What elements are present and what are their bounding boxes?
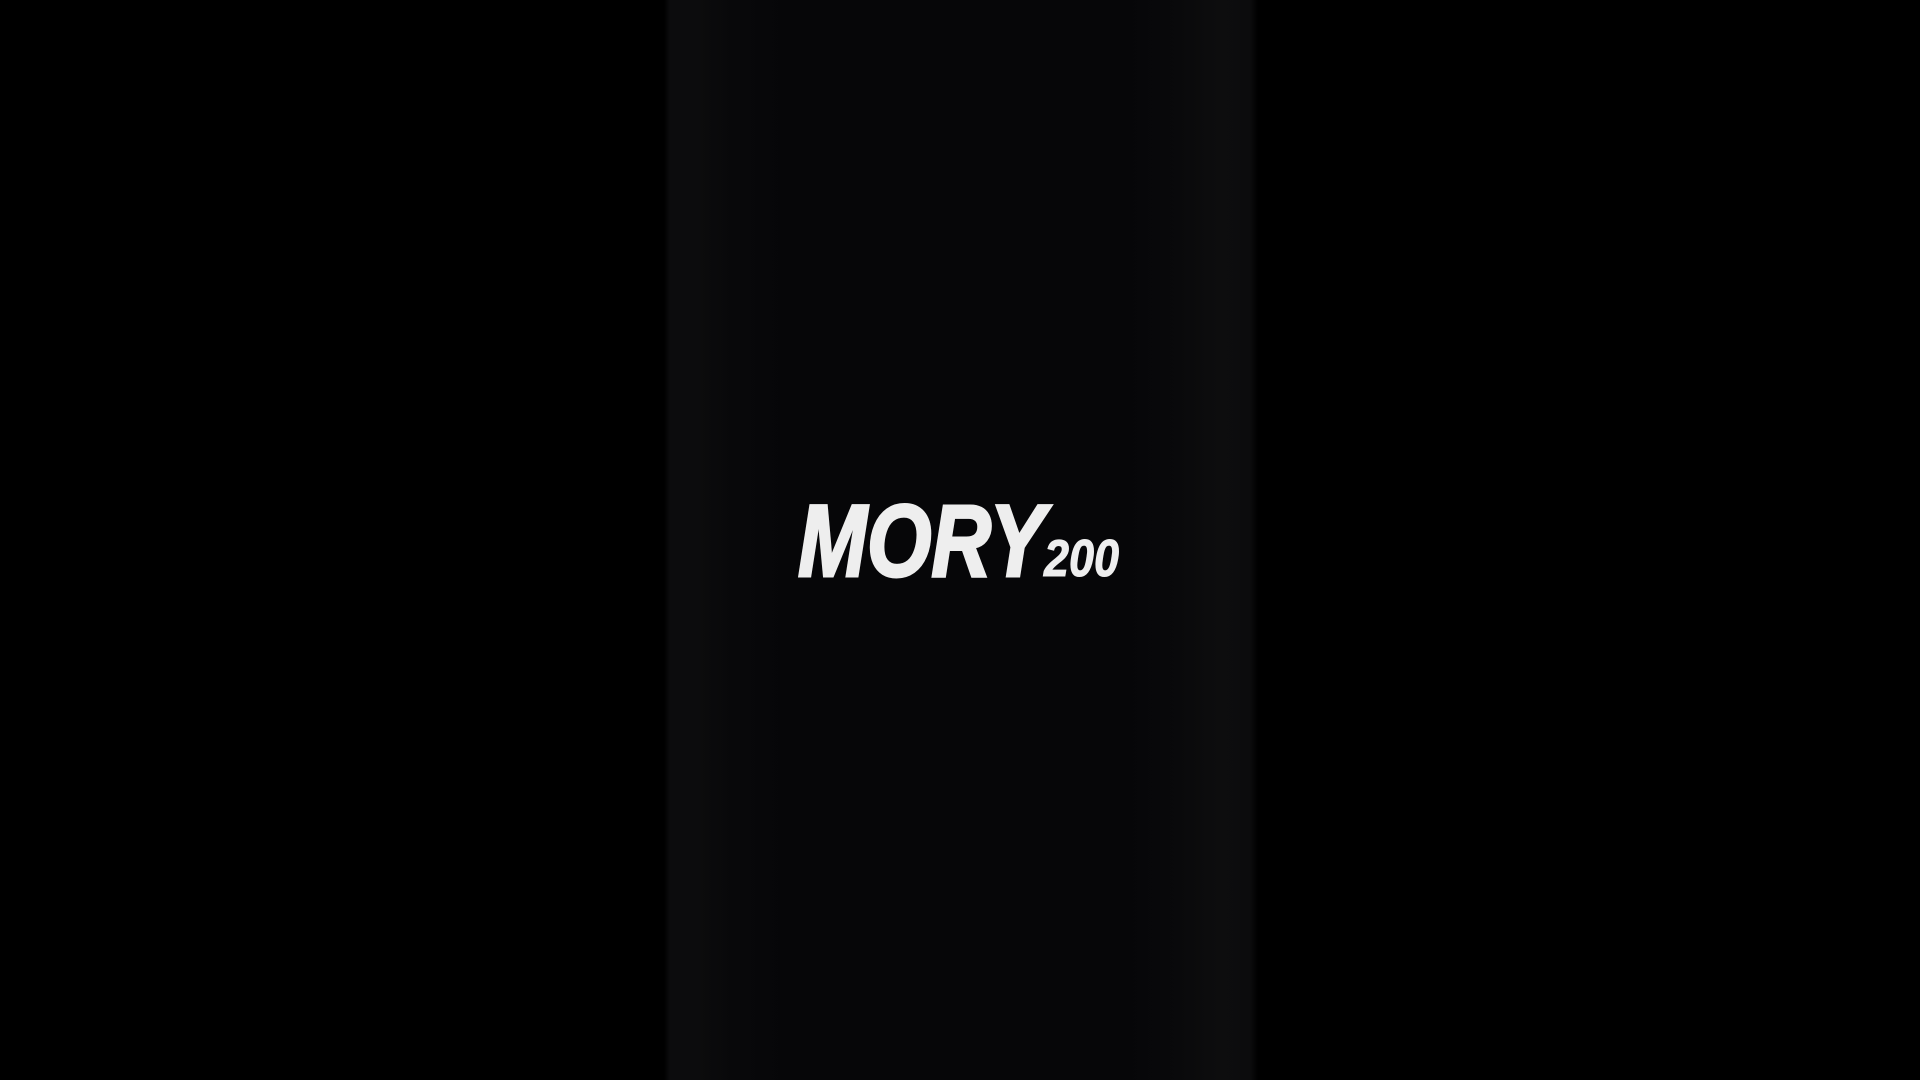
title word: MORY: MORY (798, 484, 1051, 598)
panel: central vertical dark column (664, 0, 1258, 1080)
subscript number: 200: 200 (1043, 530, 1119, 588)
